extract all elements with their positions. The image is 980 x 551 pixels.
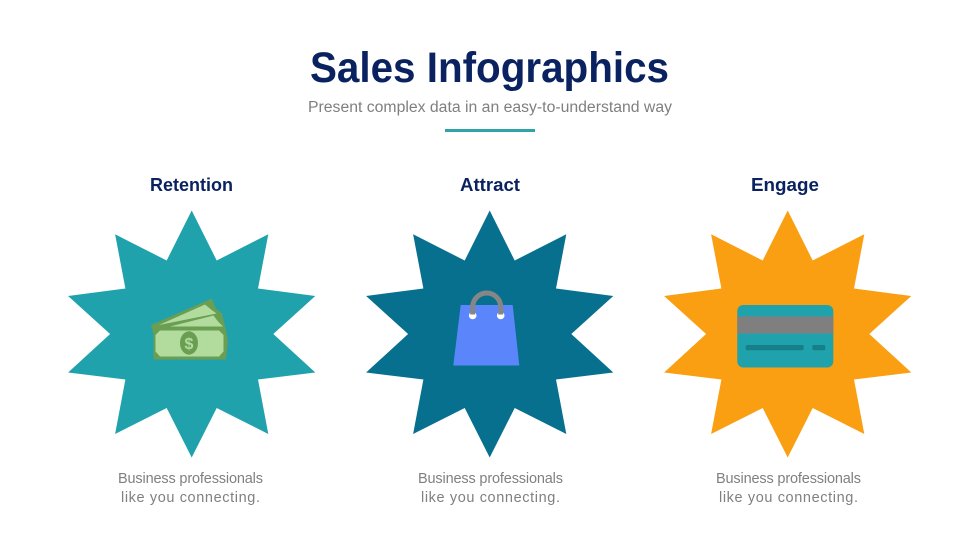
star: engage bbox=[664, 210, 911, 458]
icon: banknotes: $ bbox=[185, 336, 194, 353]
heading: engage: Engage bbox=[751, 174, 819, 195]
body text: engage: Business professionals bbox=[716, 471, 861, 487]
panel: engage bbox=[664, 174, 911, 506]
star: attract bbox=[366, 210, 613, 458]
panel: retention bbox=[68, 174, 315, 506]
body text: retention: Business professionals bbox=[118, 471, 263, 487]
title accent rule bbox=[445, 129, 535, 132]
icon: credit card bbox=[737, 305, 833, 368]
subtitle: Present complex data in an easy-to-understand way bbox=[308, 99, 672, 116]
icon: shopping bag bbox=[453, 293, 519, 366]
star: retention bbox=[68, 210, 315, 458]
body text: attract: like you connecting. bbox=[421, 490, 560, 506]
panel: attract bbox=[366, 174, 613, 506]
heading: retention: Retention bbox=[150, 174, 233, 195]
icon: banknotes bbox=[151, 298, 228, 360]
body text: attract: Business professionals bbox=[418, 471, 563, 487]
body text: retention: like you connecting. bbox=[121, 490, 260, 506]
title: Sales Infographics bbox=[310, 44, 669, 92]
heading: attract: Attract bbox=[460, 174, 520, 195]
body text: engage: like you connecting. bbox=[719, 490, 858, 506]
